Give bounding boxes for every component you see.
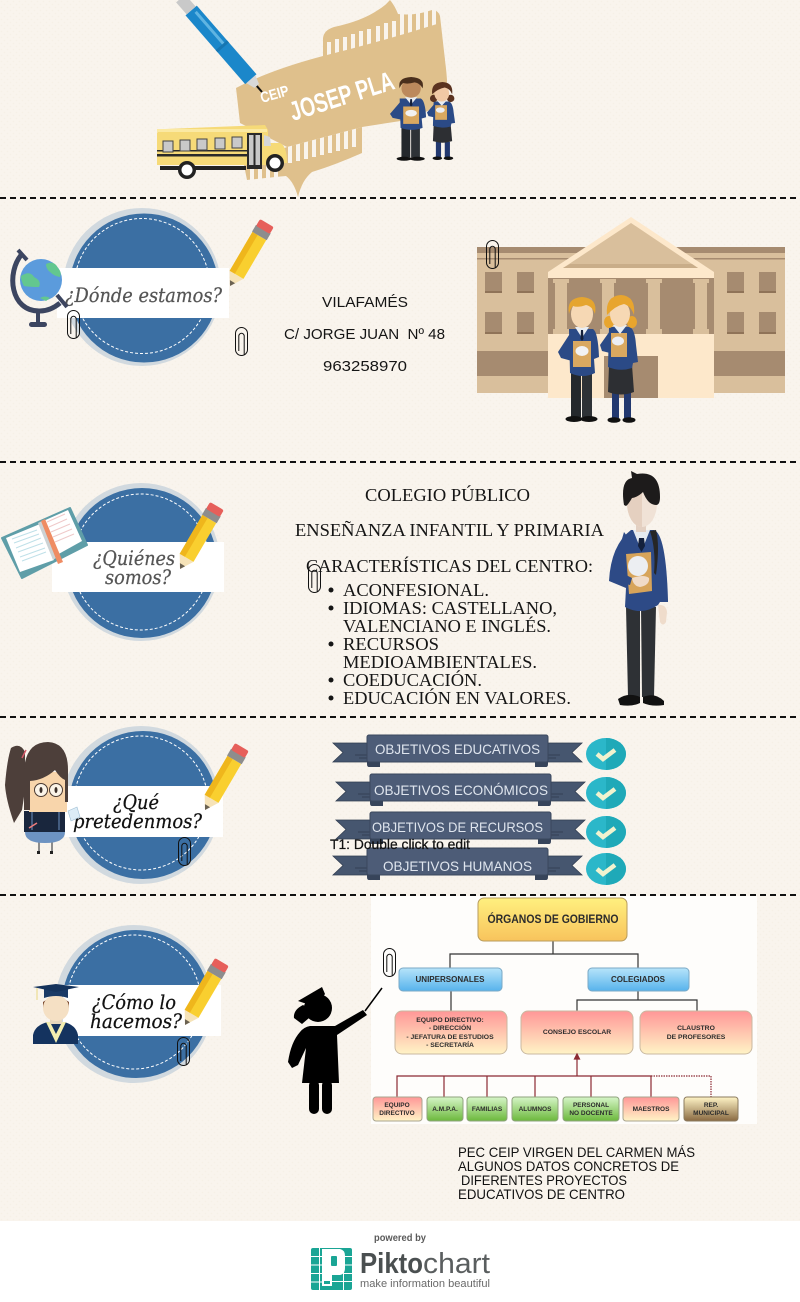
box: equipo directivo: - JEFATURA DE ESTUDIOS xyxy=(406,1034,494,1041)
icon: pencil xyxy=(178,958,229,1029)
icon: globe xyxy=(13,250,67,327)
icon: paperclip xyxy=(178,1038,190,1066)
figure: tall student with book xyxy=(609,471,668,706)
red connectors xyxy=(397,1054,711,1097)
line 2: ALGUNOS DATOS CONCRETOS DE xyxy=(458,1158,679,1174)
line 4: EDUCATIVOS DE CENTRO xyxy=(458,1186,625,1202)
icon: school bus xyxy=(157,125,287,179)
text: JOSEP PLA: JOSEP PLA xyxy=(286,66,398,127)
box: consejo escolar: CONSEJO ESCOLAR xyxy=(543,1029,611,1036)
box: claustro xyxy=(640,1011,752,1054)
ribbon: objetivos economicos: OBJETIVOS ECONÓMICOS xyxy=(374,782,548,798)
icon: paperclip xyxy=(236,328,248,356)
circle badge xyxy=(55,925,213,1083)
icon: check 3 xyxy=(586,816,626,848)
box: colegiados xyxy=(588,968,689,991)
panel: como lo hacemos badge xyxy=(33,925,229,1083)
text: CEIP: CEIP xyxy=(258,83,291,107)
ribbon: objetivos de recursos xyxy=(336,812,585,844)
circle badge xyxy=(62,726,220,884)
text: street: C/ JORGE JUAN Nº 48 xyxy=(284,326,445,343)
ribbon: objetivos humanos: OBJETIVOS HUMANOS xyxy=(383,858,532,874)
illustration: school building with students xyxy=(477,217,785,423)
icon: paperclip xyxy=(178,838,190,866)
box: title: ÓRGANOS DE GOBIERNO xyxy=(488,913,619,926)
divider 2 xyxy=(0,461,800,463)
box: personal no docente xyxy=(563,1097,619,1121)
text: caracteristicas: CARACTERÍSTICAS DEL CENTRO: xyxy=(306,555,593,576)
list: characteristics: MEDIOAMBIENTALES. xyxy=(343,652,537,672)
box: ampa xyxy=(427,1097,463,1121)
text: ensenanza: ENSEÑANZA INFANTIL Y PRIMARIA xyxy=(295,519,604,540)
list: characteristics xyxy=(328,580,571,708)
icon: pencil xyxy=(223,219,274,290)
icon: pencil xyxy=(198,743,249,814)
box: unipersonales xyxy=(399,968,502,991)
ribbon: objetivos de recursos: OBJETIVOS DE RECURSOS xyxy=(372,819,543,835)
text block: PEC note xyxy=(458,1144,695,1202)
icon: pencil xyxy=(173,502,224,573)
ribbon: objetivos humanos xyxy=(333,848,582,880)
box: consejo escolar xyxy=(521,1011,633,1054)
heading: Quienes somos: somos? xyxy=(105,565,171,589)
figure: girl with glasses xyxy=(5,742,80,854)
icon: check 2 xyxy=(586,777,626,809)
heading: que pretedenmos: pretedenmos? xyxy=(73,809,202,833)
box: ampa: A.M.P.A. xyxy=(432,1106,458,1113)
heading strip xyxy=(63,985,221,1036)
box: rep municipal: MUNICIPAL xyxy=(693,1110,729,1117)
icon: check 1 xyxy=(586,738,626,770)
figure: blond boy student xyxy=(558,297,599,422)
box: personal no docente: NO DOCENTE xyxy=(569,1110,613,1117)
icon: teacher silhouette xyxy=(288,987,382,1114)
icon: blue pen xyxy=(175,0,268,97)
text block: about the school xyxy=(295,484,604,708)
box: equipo directivo: - SECRETARÍA xyxy=(426,1040,474,1049)
heading: Quienes somos: ¿Quiénes xyxy=(93,546,175,570)
panel: donde estamos badge xyxy=(13,208,274,366)
footer: Piktochart xyxy=(0,1221,800,1302)
ribbon: objetivos economicos xyxy=(336,774,585,806)
icon: paperclip xyxy=(384,948,396,976)
text: placeholder: T1: Double click to edit xyxy=(330,836,470,852)
list: characteristics: IDIOMAS: CASTELLANO, xyxy=(343,598,557,618)
list: characteristics: VALENCIANO E INGLÉS. xyxy=(343,615,551,636)
box: equipo directivo small: DIRECTIVO xyxy=(379,1110,415,1117)
box: familias xyxy=(467,1097,507,1121)
box: colegiados: COLEGIADOS xyxy=(611,975,666,984)
figure: header boy student xyxy=(390,77,426,161)
circle badge xyxy=(62,483,220,641)
panel: que pretendemos badge xyxy=(5,726,249,884)
tagline: make information beautiful xyxy=(360,1278,490,1290)
box: equipo directivo: - DIRECCIÓN xyxy=(429,1023,471,1032)
box: personal no docente: PERSONAL xyxy=(573,1102,609,1109)
heading strip xyxy=(52,542,224,592)
building xyxy=(477,217,785,398)
box: equipo directivo xyxy=(395,1011,507,1054)
box: alumnos: ALUMNOS xyxy=(519,1106,552,1113)
logo icon xyxy=(311,1248,352,1290)
ribbon: objetivos educativos xyxy=(333,735,582,767)
checklist: objectives ribbons xyxy=(330,735,626,885)
box: title xyxy=(478,898,627,941)
box: maestros xyxy=(623,1097,679,1121)
box: familias: FAMILIAS xyxy=(472,1106,503,1113)
text: town: VILAFAMÉS xyxy=(322,294,408,311)
box: claustro: DE PROFESORES xyxy=(667,1034,726,1041)
header: school banner xyxy=(157,0,455,197)
text: powered by: powered by xyxy=(374,1233,426,1244)
divider 1 xyxy=(0,197,800,199)
heading strip xyxy=(57,268,229,318)
org chart: organos de gobierno xyxy=(371,896,757,1124)
box: rep municipal xyxy=(684,1097,738,1121)
wordmark: Piktochart xyxy=(360,1248,490,1280)
icon: check 4 xyxy=(586,853,626,885)
box: unipersonales: UNIPERSONALES xyxy=(416,975,485,984)
heading: como lo hacemos: hacemos? xyxy=(90,1009,182,1033)
list: characteristics: EDUCACIÓN EN VALORES. xyxy=(343,687,571,708)
box: claustro: CLAUSTRO xyxy=(677,1025,715,1032)
icon: open book xyxy=(2,508,87,578)
panel: quienes somos badge xyxy=(2,483,224,641)
line 1: PEC CEIP VIRGEN DEL CARMEN MÁS xyxy=(458,1144,695,1160)
list: characteristics: COEDUCACIÓN. xyxy=(343,669,482,690)
box: rep municipal: REP. xyxy=(704,1102,718,1109)
list: characteristics: ACONFESIONAL. xyxy=(343,580,489,600)
text block: address xyxy=(284,294,445,375)
ribbon: tan banner xyxy=(236,0,447,197)
list: characteristics: RECURSOS xyxy=(343,634,439,654)
box: maestros: MAESTROS xyxy=(633,1106,670,1113)
divider 3 xyxy=(0,716,800,718)
box: alumnos xyxy=(512,1097,558,1121)
heading: Donde estamos: ¿Dónde estamos? xyxy=(65,283,222,307)
figure: header girl student xyxy=(427,82,455,160)
box: equipo directivo small: EQUIPO xyxy=(384,1102,410,1109)
icon: paperclip xyxy=(486,240,498,268)
heading: como lo hacemos: ¿Cómo lo xyxy=(92,990,176,1014)
text: phone: 963258970 xyxy=(323,358,407,375)
box: equipo directivo small xyxy=(373,1097,422,1121)
heading: que pretedenmos: ¿Qué xyxy=(113,790,159,814)
line 3: DIFERENTES PROYECTOS xyxy=(461,1172,627,1188)
text: colegio publico: COLEGIO PÚBLICO xyxy=(365,484,530,505)
divider 4 xyxy=(0,894,800,896)
heading strip xyxy=(65,786,223,837)
figure: graduate xyxy=(33,984,79,1044)
ribbon: objetivos educativos: OBJETIVOS EDUCATIVOS xyxy=(375,741,540,757)
icon: paperclip xyxy=(68,310,80,338)
figure: blonde girl student xyxy=(600,295,638,423)
box: equipo directivo: EQUIPO DIRECTIVO: xyxy=(416,1017,484,1024)
circle badge xyxy=(63,208,221,366)
icon: paperclip xyxy=(308,564,320,592)
connectors xyxy=(450,941,697,1011)
